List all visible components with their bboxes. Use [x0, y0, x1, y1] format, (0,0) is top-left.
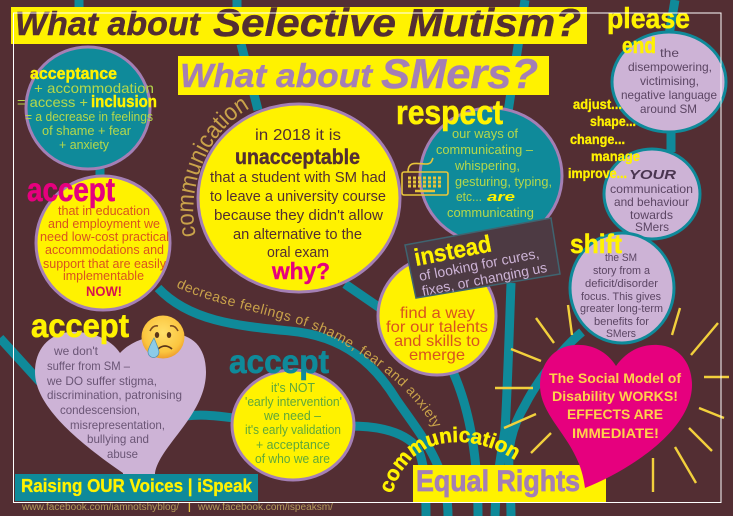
panel: respect circle — [396, 94, 562, 244]
panel: acceptance circle: + anxiety — [59, 138, 110, 152]
panel: your communication circle: towards — [630, 208, 673, 222]
panel: social model heart — [540, 345, 692, 488]
panel: respect circle: are — [487, 190, 515, 204]
verbs list: manage — [591, 148, 640, 164]
panel: accept heart: bullying and — [87, 432, 149, 446]
panel: acceptance circle: + accommodation — [34, 80, 154, 96]
panel: acceptance circle: acceptance — [30, 64, 117, 83]
panel: find a way circle — [378, 257, 496, 375]
verbs list — [568, 96, 640, 181]
callout: instead: fixes, or changing us — [421, 259, 548, 299]
panel: accept heart: misrepresentation, — [70, 418, 165, 432]
panel: shift circle: benefits for — [594, 316, 649, 328]
verbs list: change... — [570, 131, 625, 147]
panel: find a way circle: for our talents — [386, 319, 488, 336]
curved label: communication bold: communication — [382, 426, 519, 492]
panel: shift circle: shift — [570, 229, 622, 259]
icon: keyboard — [402, 158, 448, 195]
curved label: decrease feelings: decrease feelings of shame, fear and anxiety — [177, 280, 440, 426]
panel: acceptance circle — [17, 47, 157, 169]
panel: accept heart: we DO suffer stigma, — [46, 374, 157, 388]
panel: shift circle: the SM — [605, 252, 637, 264]
panel: unacceptable circle — [198, 104, 400, 292]
panel: unacceptable circle: because they didn't allow — [214, 207, 383, 224]
panel: your communication circle: communication — [610, 182, 693, 196]
panel: accept heart: accept — [31, 307, 129, 344]
title banner — [11, 2, 587, 45]
panel: respect circle: respect — [396, 94, 503, 132]
panel: accept heart — [31, 307, 206, 480]
panel: shift circle — [570, 229, 674, 343]
panel: shift circle: greater long-term — [580, 303, 663, 315]
panel: find a way circle: find a way — [400, 305, 475, 322]
equal rights banner: Equal Rights — [416, 465, 580, 498]
panel: find a way circle: emerge — [409, 347, 465, 364]
panel: early validation circle: accept — [229, 343, 329, 380]
panel: respect circle: communicating — [447, 206, 534, 220]
panel: please end circle — [607, 3, 726, 132]
panel: early validation circle: it's early validation — [245, 423, 341, 437]
panel: accept low-cost accommodations circle: implementable — [63, 269, 144, 283]
panel: your communication circle: YOUR — [629, 167, 677, 182]
panel: acceptance circle: of shame + fear — [42, 124, 131, 138]
panel: social model heart: Disability WORKS! — [552, 389, 678, 404]
panel: please end circle: negative language — [621, 88, 717, 102]
panel: please end circle: the — [660, 46, 679, 60]
panel: respect circle: our ways of — [452, 127, 519, 141]
panel: your communication circle — [604, 149, 700, 239]
verbs list: adjust... — [573, 96, 622, 112]
panel: accept low-cost accommodations circle: that in education — [58, 204, 150, 218]
panel: your communication circle: SMers — [635, 220, 669, 234]
footer links: | — [188, 502, 191, 513]
panel: unacceptable circle: unacceptable — [235, 146, 360, 169]
callout: instead: of looking for cures, — [418, 245, 540, 284]
panel: social model heart: The Social Model of — [549, 371, 682, 386]
panel: shift circle: SMers — [606, 328, 636, 340]
panel: acceptance circle: = a decrease in feelings — [25, 110, 153, 124]
subtitle banner: SMers? — [381, 50, 538, 97]
panel: accept low-cost accommodations circle: accommodations and — [45, 243, 164, 257]
panel: unacceptable circle: oral exam — [267, 244, 329, 261]
panel: accept low-cost accommodations circle: and employment we — [48, 217, 160, 231]
subtitle banner: What about — [180, 57, 374, 94]
panel: accept heart: condescension, — [60, 403, 140, 417]
panel: please end circle: disempowering, — [628, 60, 712, 74]
panel: social model heart: IMMEDIATE! — [572, 426, 659, 441]
panel: shift circle: story from a — [593, 265, 651, 277]
curved label: communication: communication — [180, 99, 249, 236]
panel: early validation circle: + acceptance — [256, 438, 330, 452]
panel: unacceptable circle: that a student with SM had — [210, 169, 386, 186]
panel: shift circle: deficit/disorder — [585, 278, 658, 290]
title banner: What about — [15, 5, 202, 42]
panel: accept heart: discrimination, patronising — [47, 388, 182, 402]
footer links — [21, 502, 333, 513]
panel: please end circle: please — [607, 3, 690, 35]
panel: early validation circle: we need – — [263, 409, 321, 423]
verbs list: shape... — [590, 113, 636, 129]
panel: respect circle: whispering, — [454, 159, 520, 173]
panel: social model heart: EFFECTS ARE — [567, 407, 663, 422]
icon: crying face emoji — [142, 316, 184, 358]
panel: accept low-cost accommodations circle: support that are easily — [43, 257, 167, 271]
panel: unacceptable circle: in 2018 it is — [255, 127, 341, 144]
callout: instead — [405, 218, 560, 299]
panel: early validation circle: of who we are — [255, 452, 330, 466]
panel: please end circle: end — [622, 33, 656, 58]
panel: accept low-cost accommodations circle — [27, 171, 170, 310]
raising our voices banner: Raising OUR Voices | iSpeak — [21, 476, 253, 496]
panel: acceptance circle: inclusion — [91, 92, 157, 111]
panel: early validation circle: 'early intervention' — [245, 395, 342, 409]
panel: unacceptable circle: why? — [271, 258, 330, 284]
sun rays — [495, 305, 729, 492]
panel: accept heart: abuse — [107, 447, 138, 461]
callout: instead: instead — [412, 231, 494, 272]
footer links: www.facebook.com/iamnotshyblog/ — [21, 502, 179, 513]
panel: early validation circle: it's NOT — [271, 381, 315, 395]
panel: respect circle: gesturing, typing, — [455, 175, 552, 189]
panel: please end circle: around SM — [640, 102, 697, 116]
panel: unacceptable circle: to leave a university course — [210, 188, 386, 205]
panel: early validation circle — [229, 343, 354, 480]
footer links: www.facebook.com/ispeaksm/ — [197, 502, 333, 513]
panel: acceptance circle: = access + — [17, 94, 88, 110]
panel: accept heart: suffer from SM – — [47, 359, 130, 373]
panel: find a way circle: and skills to — [394, 333, 480, 350]
panel: accept low-cost accommodations circle: accept — [27, 171, 115, 208]
panel: your communication circle: and behaviour — [614, 195, 689, 209]
panel: accept low-cost accommodations circle: NOW! — [86, 283, 122, 299]
subtitle banner — [178, 50, 549, 97]
panel: respect circle: etc... — [456, 190, 482, 204]
verbs list: improve... — [568, 165, 627, 181]
panel: please end circle: victimising, — [640, 74, 699, 88]
title banner: Selective Mutism? — [213, 2, 581, 45]
panel: accept heart: we don't — [53, 344, 99, 358]
panel: accept low-cost accommodations circle: need low-cost practical — [40, 230, 169, 244]
panel: unacceptable circle: an alternative to the — [233, 226, 362, 243]
panel: shift circle: focus. This gives — [581, 291, 661, 303]
panel: respect circle: communicating – — [436, 143, 533, 157]
